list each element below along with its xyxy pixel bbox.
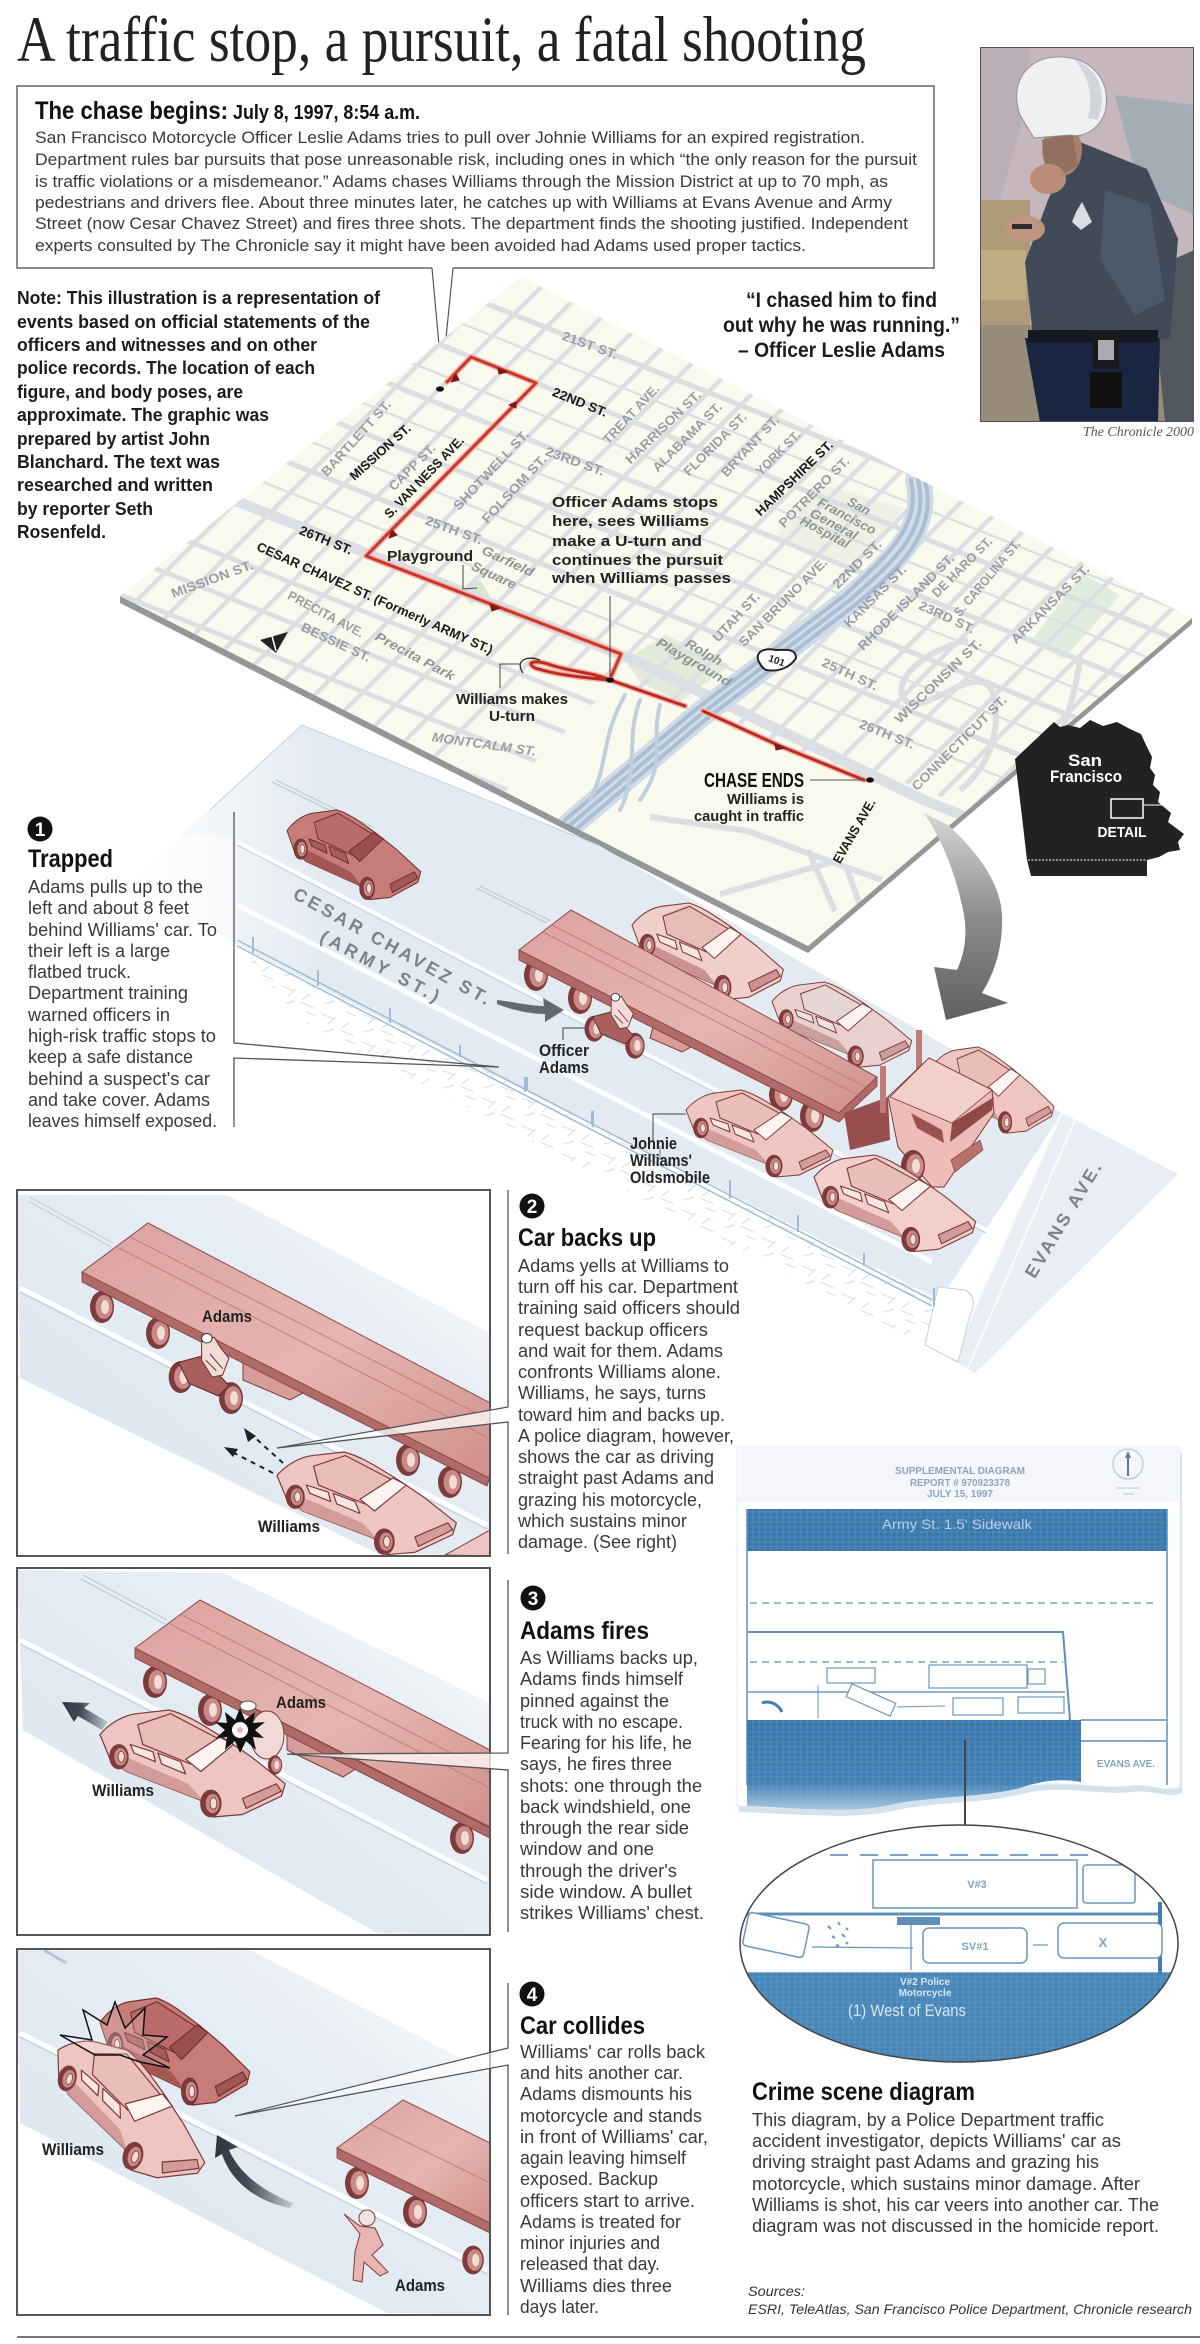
body: Trapped: and take cover. Adams (28, 1090, 210, 1110)
panel 3: Adams fires illustration (17, 1568, 496, 1935)
step 2 text: Car backs up (277, 1190, 740, 1554)
chase text: San Francisco Motorcycle Officer Leslie Adams tries to pull over Johnie Williams for an expired registration. (35, 128, 865, 147)
note text: Note: This illustration is a representation of (17, 288, 381, 308)
map labels (169, 328, 1092, 866)
title: A traffic stop, a pursuit, a fatal shooting (17, 4, 866, 76)
detail oval: V#2 Police (900, 1977, 950, 1988)
officer on foot (344, 2210, 388, 2282)
map labels: S. VAN NESS AVE. (381, 433, 467, 521)
pointer to scene 1 (234, 812, 499, 1127)
body: Adams fires: As Williams backs up, (520, 1648, 698, 1668)
car: Williams' Oldsmobile (686, 1090, 833, 1177)
pointer to panel 3 (287, 1580, 508, 1932)
map labels: TREAT AVE. (600, 381, 662, 447)
body: Trapped (27, 877, 217, 1131)
quote: “I chased him to find (746, 289, 937, 312)
map labels: HAMPSHIRE ST. (752, 437, 836, 519)
label: Officer Adams (539, 1028, 589, 1077)
map labels: ALABAMA ST. (649, 399, 725, 475)
label: Adams: Adams (276, 1693, 326, 1712)
number 4 (520, 1982, 544, 2006)
map labels: CAPP ST. (386, 441, 439, 494)
callout: Officer Adams stops: continues the pursuit (552, 552, 723, 569)
map labels: 22ND ST. (829, 536, 885, 592)
body: Car collides: days later. (520, 2297, 599, 2317)
map labels: HARRISON ST. (622, 387, 704, 467)
label: Williams: Williams (258, 1517, 320, 1536)
number 4: 4 (527, 1985, 538, 2006)
map labels: KANSAS ST. (841, 562, 909, 630)
diagram title: SUPPLEMENTAL DIAGRAM (895, 1466, 1025, 1477)
quote: – Officer Leslie Adams (738, 339, 945, 362)
locator map: San Francisco (1015, 720, 1184, 876)
locator map: San Francisco: DETAIL (1098, 824, 1146, 841)
detail oval: V#3 (967, 1879, 987, 1891)
detail oval: (1) West of Evans (848, 2001, 966, 2020)
sources (748, 2283, 1192, 2317)
number 3 (520, 1586, 546, 1610)
detail oval (740, 1825, 1180, 2063)
chase text: experts consulted by The Chronicle say it might have been avoided had Adams used proper tactics. (35, 236, 806, 255)
callout: Officer Adams stops: here, sees Williams (552, 513, 709, 530)
number 2 (520, 1194, 544, 1218)
note text: Rosenfeld. (17, 522, 106, 542)
body: Trapped: keep a safe distance (28, 1047, 193, 1067)
body: Car backs up: A police diagram, however, (518, 1426, 734, 1446)
street name: Cesar Chavez: CESAR CHAVEZ ST. (290, 884, 494, 1009)
label: Johnie Williams' Oldsmobile (630, 1114, 710, 1187)
arrow: map to street detail (924, 813, 1008, 1020)
heading: Adams fires: Adams fires (520, 1617, 649, 1645)
body: Adams fires: side window. A bullet (520, 1882, 692, 1902)
car: second car beside truck (772, 982, 912, 1067)
body: Car backs up: confronts Williams alone. (518, 1362, 721, 1382)
callout: chase ends: caught in traffic (694, 808, 804, 825)
map labels: POTRERO ST. (775, 453, 853, 531)
icon: compass (1113, 1449, 1143, 1494)
body: Car collides: Adams is treated for (520, 2212, 681, 2232)
map labels: RHODE ISLAND ST. (855, 551, 957, 653)
step 4 text: Car collides (235, 1982, 708, 2317)
label: playground (387, 548, 477, 589)
map labels: MISSION ST. (346, 421, 414, 483)
body: Trapped: flatbed truck. (28, 962, 131, 982)
caption body: accident investigator, depicts Williams' car as (752, 2131, 1121, 2151)
label: playground: Playground (387, 548, 473, 565)
body: Trapped: their left is a large (28, 941, 170, 961)
map labels: 22ND ST. (550, 384, 610, 420)
collision burst (60, 2002, 170, 2068)
body: Car backs up: shows the car as driving (518, 1447, 714, 1467)
step 3 text: Adams fires (287, 1580, 704, 1932)
map labels: CESAR CHAVEZ ST. (Formerly ARMY ST.) (255, 539, 495, 657)
label: Johnie Williams' Oldsmobile: Williams' (630, 1151, 692, 1170)
scene 1: street illustration (134, 725, 1178, 1373)
note text: events based on official statements of the (17, 312, 370, 332)
chase heading (35, 97, 420, 125)
map labels: Playground (654, 635, 735, 690)
heading: Car backs up: Car backs up (518, 1224, 656, 1252)
callout: Williams makes U-turn (456, 658, 568, 725)
callout: chase ends: Williams is (727, 791, 804, 808)
caption body: This diagram, by a Police Department traffic (752, 2110, 1104, 2130)
body: Adams fires: Adams finds himself (520, 1669, 684, 1689)
chase heading: The chase begins: (35, 97, 228, 125)
motorcycle (585, 993, 645, 1059)
body: Car backs up: damage. (See right) (518, 1532, 677, 1552)
map labels: MISSION ST. (169, 557, 255, 601)
diagram plan (747, 1509, 1167, 1810)
car: dark parked car (287, 810, 421, 900)
panel 2: car backs up illustration (17, 1190, 496, 1556)
muzzle flash (215, 1708, 265, 1753)
panel 4: car collides illustration (17, 1949, 496, 2315)
map labels: 26TH ST. (857, 716, 917, 752)
diagram plan: Army St. 1.5' Sidewalk (882, 1516, 1033, 1532)
body: Adams fires: through the rear side (520, 1818, 689, 1838)
body: Car backs up: Williams, he says, turns (518, 1383, 706, 1403)
chase text (35, 128, 917, 255)
map labels: BRYANT ST. (718, 412, 782, 480)
icon: highway 101 shield (758, 649, 796, 670)
car: Williams (100, 1710, 285, 1817)
callout: Officer Adams stops: when Williams passes (551, 570, 731, 587)
body: Car backs up: toward him and backs up. (518, 1405, 725, 1425)
body: Car collides: and hits another car. (520, 2063, 683, 2083)
label: Johnie Williams' Oldsmobile: Oldsmobile (630, 1168, 710, 1187)
step 1 text: Trapped (15, 812, 499, 1132)
arrow: to officer (497, 998, 564, 1022)
photo credit: The Chronicle 2000 (1083, 425, 1194, 440)
label: Williams: Williams (92, 1781, 154, 1800)
diagram title: JULY 15, 1997 (927, 1489, 993, 1500)
quote: out why he was running.” (723, 314, 960, 337)
body: Adams fires: pinned against the (520, 1691, 669, 1711)
diagram title: REPORT # 970923378 (910, 1478, 1010, 1489)
label: Johnie Williams' Oldsmobile: Johnie (630, 1134, 677, 1153)
sources: ESRI, TeleAtlas, San Francisco Police Department, Chronicle research (748, 2301, 1192, 2317)
number 1: 1 (35, 820, 46, 841)
map labels: Francisco (815, 494, 879, 538)
label: Adams: Adams (395, 2276, 445, 2295)
body: Trapped: left and about 8 feet (28, 898, 189, 918)
pointer to panel 4 (235, 1983, 508, 2315)
note text: police records. The location of each (17, 358, 315, 378)
detail oval: X (1099, 1935, 1108, 1950)
body: Trapped: Department training (28, 983, 188, 1003)
body: Trapped: high-risk traffic stops to (28, 1026, 216, 1046)
car: rear car beside truck (632, 903, 783, 1000)
body: Car collides: Williams' car rolls back (520, 2042, 706, 2062)
panel: the chase begins (17, 86, 934, 378)
body: Adams fires: shots: one through the (520, 1776, 702, 1796)
diagram title (895, 1466, 1025, 1500)
body: Car backs up: training said officers should (518, 1298, 740, 1318)
car: car ahead of cab (932, 1047, 1054, 1133)
map labels: PRECITA AVE. (285, 588, 367, 640)
car: Williams (277, 1452, 456, 1555)
chase text: pedestrians and drivers flee. About three minutes later, he catches up with Williams at Evans Avenue and Army (35, 193, 893, 212)
body: Trapped: Adams pulls up to the (28, 877, 203, 897)
chase text: is traffic violations or a misdemeanor.” Adams chases Williams through the Mission District at up to 70 mph, as (35, 172, 888, 191)
body: Adams fires (519, 1648, 704, 1923)
map labels: S. CAROLINA ST. (951, 537, 1023, 619)
map labels: SHOTWELL ST. (450, 427, 532, 513)
body: Car collides: exposed. Backup (520, 2169, 658, 2189)
map labels: 21ST ST. (560, 328, 620, 362)
map labels: DE HARO ST. (929, 534, 995, 600)
body: Car collides: officers start to arrive. (520, 2191, 695, 2211)
body: Adams fires: says, he fires three (520, 1754, 672, 1774)
map labels: BARTLETT ST. (318, 397, 394, 479)
chase text: Street (now Cesar Chavez Street) and fires three shots. The department finds the shooting justified. Independent (35, 214, 908, 233)
label: Williams: Williams (42, 2140, 104, 2159)
note text: Blanchard. The text was (17, 452, 220, 472)
note text: approximate. The graphic was (17, 405, 269, 425)
body: Trapped: leaves himself exposed. (28, 1111, 217, 1131)
map labels: Hospital (798, 513, 853, 552)
body: Trapped: behind a suspect's car (28, 1069, 210, 1089)
map: pursuit route (120, 277, 1192, 953)
body: Car backs up: turn off his car. Department (518, 1277, 738, 1297)
body: Car backs up: grazing his motorcycle, (518, 1490, 702, 1510)
map labels: 26TH ST. (297, 523, 355, 557)
body: Adams fires: truck with no escape. (520, 1712, 683, 1732)
sources: Sources: (748, 2283, 805, 2299)
car: Williams (57, 2040, 206, 2178)
map labels: General (807, 505, 861, 543)
map labels: Rolph (683, 636, 725, 669)
note text (17, 288, 381, 542)
chase heading: July 8, 1997, 8:54 a.m. (233, 102, 420, 124)
map labels: SAN BRUNO AVE. (736, 555, 830, 649)
icon: north arrow (260, 632, 288, 653)
number 3: 3 (528, 1589, 538, 1610)
body: Trapped: warned officers in (27, 1005, 170, 1025)
body: Car collides: Williams dies three (520, 2276, 672, 2296)
detail oval: SV#1 (962, 1941, 988, 1953)
body: Car collides: released that day. (520, 2254, 660, 2274)
number 1 (28, 816, 52, 842)
note text: officers and witnesses and on other (17, 335, 317, 355)
map labels: Square (469, 558, 519, 592)
map labels: San (845, 494, 873, 518)
body: Adams fires: through the driver's (520, 1861, 677, 1881)
caption body: Williams is shot, his car veers into another car. The (752, 2195, 1159, 2215)
note text: researched and written (17, 475, 213, 495)
flatbed truck (519, 910, 994, 1187)
map labels: YORK ST. (753, 428, 803, 478)
note text: prepared by artist John (17, 429, 210, 449)
heading: Car collides: Car collides (520, 2012, 645, 2040)
callout: Williams makes U-turn: U-turn (489, 708, 535, 725)
officer Adams (240, 1701, 284, 1775)
diagram plan: EVANS AVE. (1097, 1759, 1155, 1770)
street name: Evans: EVANS AVE. (1021, 1159, 1106, 1281)
label: Officer Adams: Officer (539, 1041, 589, 1060)
map labels: Garfield (479, 542, 538, 580)
callout: chase ends (694, 770, 864, 825)
dashed arrows (232, 1435, 283, 1473)
pointer to panel 2 (277, 1190, 508, 1554)
map labels: Precita Park (373, 629, 458, 684)
body: Adams fires: Fearing for his life, he (520, 1733, 692, 1753)
body: Trapped: behind Williams' car. To (28, 920, 217, 940)
map labels: UTAH ST. (709, 589, 763, 645)
caption heading: Crime scene diagram (752, 2078, 975, 2106)
body: Adams fires: strikes Williams' chest. (520, 1903, 704, 1923)
map labels: FLORIDA ST. (680, 409, 750, 479)
callout: Officer Adams stops: Officer Adams stops (552, 494, 718, 511)
police diagram (737, 1447, 1182, 1816)
motorcycle with Adams (169, 1334, 243, 1414)
locator map: San Francisco: San (1068, 751, 1102, 770)
locator map: San Francisco: Francisco (1050, 767, 1122, 786)
body: Car backs up: Adams yells at Williams to (518, 1256, 729, 1276)
callout: chase ends: CHASE ENDS (704, 770, 804, 792)
chase text: Department rules bar pursuits that pose unreasonable risk, including ones in which “the only reason for the pursuit (35, 150, 917, 169)
caption body: diagram was not discussed in the homicide report. (752, 2216, 1159, 2236)
street name: Cesar Chavez: (ARMY ST.) (317, 926, 443, 1006)
arrow: direction of car (62, 1702, 108, 1730)
photo: officer Adams (980, 47, 1194, 422)
map labels: ARKANSAS ST. (1008, 562, 1092, 646)
callout: Officer Adams stops (551, 494, 731, 676)
body: Car backs up: request backup officers (518, 1320, 708, 1340)
heading: Trapped: Trapped (28, 845, 113, 873)
red pursuit route (366, 357, 864, 780)
route dots (436, 386, 874, 783)
number 2: 2 (527, 1197, 537, 1218)
body: Car backs up: and wait for them. Adams (518, 1341, 723, 1361)
callout: Officer Adams stops: make a U-turn and (552, 533, 702, 550)
body: Adams fires: window and one (519, 1839, 654, 1859)
crime scene diagram caption (752, 2078, 1159, 2236)
body: Car backs up: straight past Adams and (518, 1468, 714, 1488)
map labels: 23RD ST. (543, 443, 607, 479)
label: Officer Adams: Adams (539, 1058, 589, 1077)
body: Car collides: in front of Williams' car, (520, 2127, 708, 2147)
body: Car backs up (517, 1256, 740, 1552)
detail oval: Motorcycle (899, 1988, 952, 1999)
car: front car (814, 1155, 976, 1252)
caption body (752, 2110, 1159, 2236)
map labels: 25TH ST. (423, 513, 485, 547)
connector: diagram to detail (964, 1740, 966, 1825)
body: Car backs up: which sustains minor (517, 1511, 687, 1531)
map labels: MONTCALM ST. (431, 729, 537, 759)
icon: highway 101 shield: 101 (767, 653, 787, 670)
truck (337, 2100, 496, 2274)
body: Car collides: motorcycle and stands (520, 2106, 702, 2126)
callout: Williams makes U-turn: Williams makes (456, 691, 568, 708)
map labels: CONNECTICUT ST. (908, 692, 1010, 794)
body: Adams fires: back windshield, one (520, 1797, 691, 1817)
body: Car collides: minor injuries and (520, 2233, 660, 2253)
caption body: driving straight past Adams and grazing his (752, 2152, 1099, 2172)
caption body: motorcycle, which sustains minor damage. After (752, 2174, 1140, 2194)
label: Adams: Adams (202, 1307, 252, 1326)
body: Car collides (520, 2042, 708, 2317)
car: struck dark car (100, 1998, 250, 2105)
map labels: 25TH ST. (820, 655, 880, 694)
note text: by reporter Seth (17, 499, 153, 519)
map labels: BESSIE ST. (299, 619, 373, 665)
map labels: 23RD ST. (917, 598, 977, 637)
body: Car collides: Adams dismounts his (520, 2084, 692, 2104)
map labels: EVANS AVE. (830, 796, 879, 866)
body: Car collides: again leaving himself (520, 2148, 687, 2168)
curved arrow (215, 2135, 293, 2208)
map labels: FOLSOM ST. (479, 452, 550, 526)
quote (723, 289, 960, 362)
note text: figure, and body poses, are (17, 382, 243, 402)
map labels: WISCONSIN ST. (891, 636, 985, 726)
